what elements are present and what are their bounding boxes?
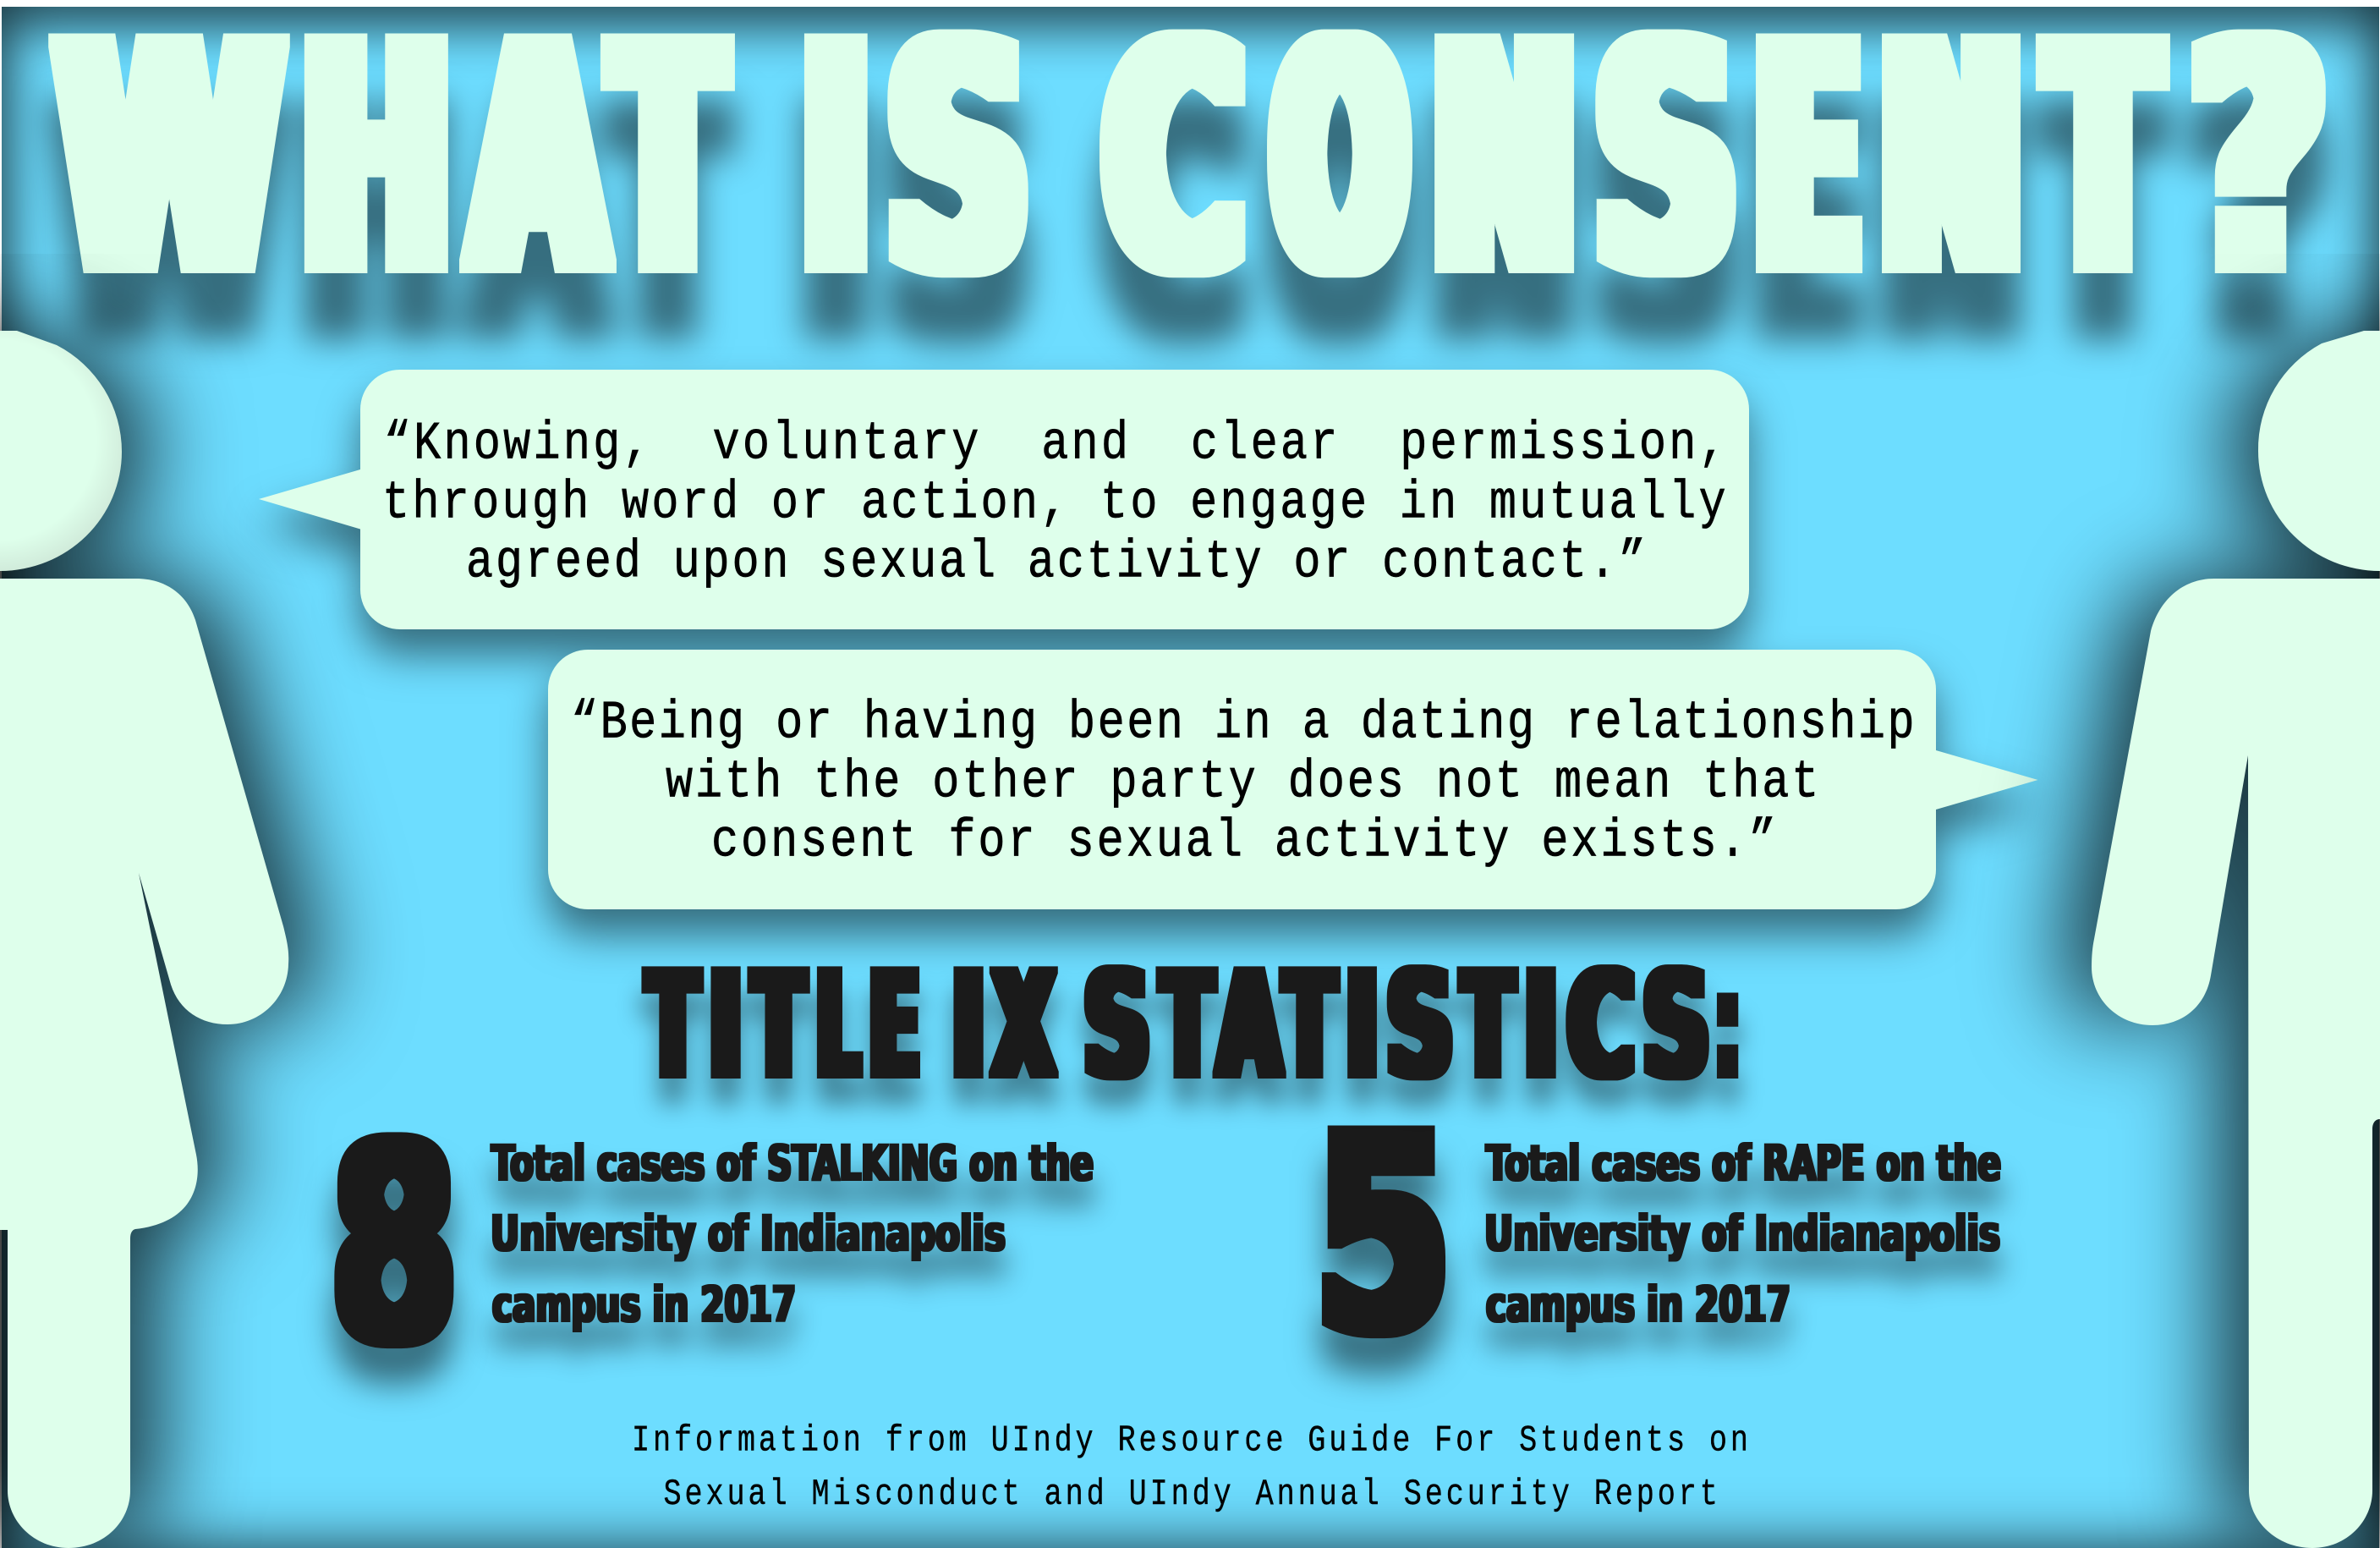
heading: title ix statistics: S: [1643, 941, 1708, 1110]
quote text: definition of consent: through word or action, to engage in mutually: [382, 473, 1726, 534]
heading: title ix statistics: I: [952, 941, 984, 1110]
heading: title ix statistics: T: [754, 941, 803, 1110]
figure: right person: [2092, 321, 2380, 1548]
number 5: 5: [1313, 1079, 1453, 1392]
heading: title ix statistics: I: [710, 941, 742, 1110]
stat descriptions: University of Indianapolis: [1484, 1205, 2000, 1262]
heading: title ix statistics: [628, 941, 1753, 1122]
heading: title ix statistics: A: [1219, 941, 1280, 1110]
heading: title ix statistics: E: [870, 941, 919, 1110]
speech bubbles: [259, 370, 2038, 909]
figure: left person in dress: [0, 321, 288, 1548]
body: [2092, 579, 2380, 1548]
body: [0, 579, 288, 1548]
heading: title ix statistics: T: [648, 941, 698, 1110]
heading: title ix statistics: T: [1162, 941, 1212, 1110]
heading: title ix statistics: :: [1719, 941, 1736, 1110]
bubble: dating relationship: [548, 650, 2038, 909]
stat descriptions: [491, 1134, 2001, 1333]
source note: Information from UIndy Resource Guide For Students on: [632, 1419, 1748, 1462]
title: [27, 0, 2349, 368]
stat descriptions: Total cases of STALKING on the: [491, 1134, 1094, 1192]
stat descriptions: University of Indianapolis: [491, 1205, 1006, 1262]
heading: title ix statistics: L: [818, 941, 858, 1110]
quote text: dating relationship: “Being or having been in a dating relationship: [571, 693, 1915, 754]
quote text: dating relationship: [571, 693, 1915, 872]
heading: title ix statistics: I: [1346, 941, 1378, 1110]
stat descriptions: Total cases of RAPE on the: [1486, 1134, 2001, 1192]
quote text: definition of consent: “Knowing, voluntary and clear permission,: [384, 414, 1726, 475]
source note: [632, 1419, 1748, 1515]
stat descriptions: campus in 2017: [1486, 1276, 1790, 1333]
heading: title ix statistics: I: [1525, 941, 1557, 1110]
heading: title ix statistics: C: [1568, 941, 1634, 1110]
bubble: definition of consent: [259, 370, 1749, 629]
heading: title ix statistics: S: [1084, 941, 1150, 1110]
head: [2258, 331, 2380, 571]
source note: Sexual Misconduct and UIndy Annual Security Report: [663, 1474, 1718, 1515]
heading: title ix statistics: T: [1285, 941, 1335, 1110]
stat numbers: [330, 1079, 1453, 1402]
heading: title ix statistics: T: [1463, 941, 1513, 1110]
quote text: definition of consent: agreed upon sexual activity or contact.”: [466, 532, 1646, 593]
number 8: 8: [330, 1090, 458, 1402]
stat descriptions: campus in 2017: [492, 1276, 796, 1333]
quote text: dating relationship: consent for sexual activity exists.”: [711, 811, 1776, 872]
quote text: dating relationship: with the other party does not mean that: [666, 752, 1818, 813]
heading: title ix statistics: X: [994, 941, 1053, 1110]
head: [0, 331, 122, 571]
quote text: definition of consent: [382, 414, 1726, 593]
heading: title ix statistics: S: [1387, 941, 1453, 1110]
